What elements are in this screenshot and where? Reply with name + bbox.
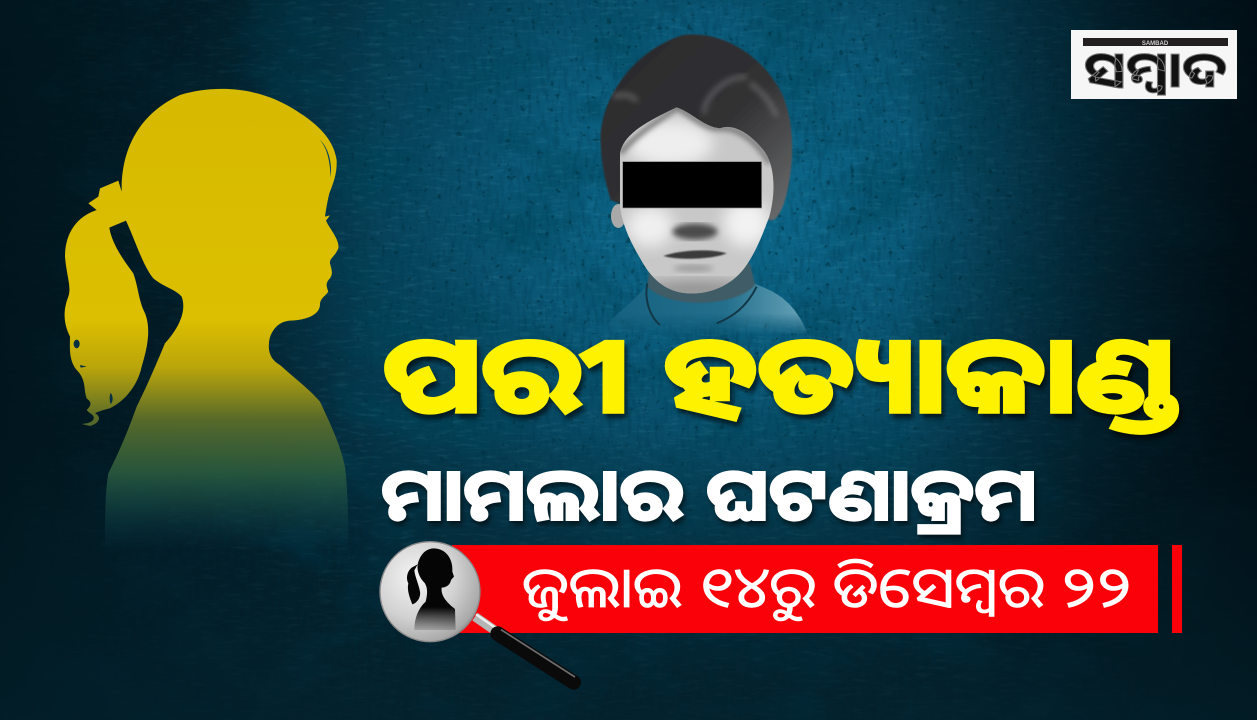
title: yellow headline: ପରୀ ହତ୍ୟାକାଣ୍ଡ	[383, 315, 1179, 435]
logo: Sambad newspaper: ସମ୍ବାଦ	[1084, 42, 1227, 98]
handle grip	[498, 634, 574, 682]
title: yellow headline: ପରୀ ହତ୍ୟାକାଣ୍ଡ	[386, 320, 1182, 440]
lens	[380, 542, 480, 642]
banner: red date strip: ଜୁଲାଇ ୧୪ରୁ ଡିସେମ୍ବର ୨୨	[522, 556, 1132, 621]
hair	[601, 34, 792, 220]
photo: child portrait with censored eyes	[600, 34, 808, 335]
handle collar	[475, 617, 499, 633]
neck	[647, 263, 755, 303]
hair highlights	[613, 77, 777, 117]
shoulders	[600, 283, 808, 335]
nose shadow	[672, 224, 718, 240]
banner: red date strip	[452, 545, 1182, 633]
subtitle: white headline: ମାମଲାର ଘଟଣାକ୍ରମ	[383, 459, 1039, 540]
lens girl silhouette	[407, 548, 456, 630]
censor bar	[623, 162, 762, 208]
ear	[611, 204, 626, 228]
logo: Sambad newspaper: SAMBAD	[1142, 41, 1169, 47]
subtitle: white headline: ମାମଲାର ଘଟଣାକ୍ରମ	[381, 455, 1037, 536]
mouth	[663, 250, 727, 259]
necklace	[646, 283, 757, 325]
logo: Sambad newspaper	[1071, 30, 1237, 99]
face	[620, 108, 774, 294]
icon: yellow girl silhouette with ponytail	[65, 89, 348, 550]
icon: magnifying glass with girl silhouette	[380, 542, 575, 682]
